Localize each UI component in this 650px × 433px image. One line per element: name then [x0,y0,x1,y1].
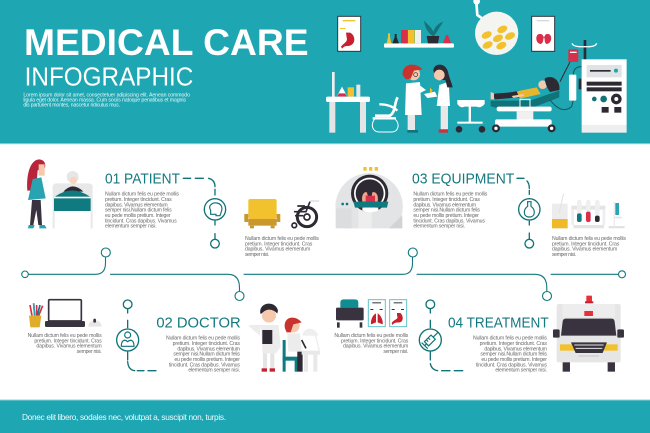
body text: Nullam dictum felis eu pede mollis [166,336,240,342]
surgical lamp [473,0,518,55]
body text: Nullam dictum felis eu pede mollis [413,192,488,198]
side text [334,333,409,355]
title: MEDICAL CARE [24,21,309,63]
side text: dapibus. Vivamus elementum [245,247,310,253]
body text: tincidunt. Cras dapibus. Vivamus [169,362,240,368]
section 04 treatment [334,296,624,374]
heading: 02 DOCTOR [156,314,241,331]
patient on treatment bed [491,77,559,132]
lab table [326,72,370,133]
body text: pretium. Integer tincidunt. Cras [480,341,547,347]
icon: bed [336,299,364,328]
body text: semper nisi.Nullam dictum felis [173,352,240,358]
doctor figure, dark hair [424,65,453,133]
body text: pretium. Integer tincidunt. Cras [105,197,172,203]
icon: test tube rack [571,200,605,228]
icon: stand [609,202,625,228]
dialysis machine [582,59,627,133]
side text: semper nisi. [552,252,576,258]
side text: dapibus. Vivamus elementum [343,344,408,350]
icon: armchair [244,199,280,228]
body text: dapibus. Vivamus elementum [413,202,476,208]
side text: Nullam dictum felis eu pede mollis [28,333,102,339]
illustration: ambulance [553,296,624,372]
body text: dapibus. Vivamus elementum [484,346,547,352]
body text: elementum semper nisi. [188,368,240,374]
side text: Nullam dictum felis eu pede mollis [334,333,409,339]
side text [28,333,102,355]
intro text: dis parturient montes, nascetur ridiculus mus. [23,103,120,109]
body text: eu pede mollis pretium. Integer [105,213,171,219]
side text: dapibus. Vivamus elementum [552,247,617,253]
chair [372,97,398,132]
body text: Nullam dictum felis eu pede mollis [105,192,179,198]
side text: semper nisi. [245,252,269,258]
icon: laptop [45,300,85,327]
title block [23,21,309,109]
icon: pencil cup [29,303,43,327]
illustration: visitor and patient in bed [27,159,93,228]
section 03 equipment [335,167,626,258]
body text: pretium. Integer tincidunt. Cras [173,341,240,347]
icon: mouse [88,319,102,327]
icon: user in circle with connector [117,300,156,371]
side text: pretium. Integer tincidunt. Cras [552,241,620,247]
body text [166,336,240,374]
side text [552,236,626,258]
header illustration: hospital room [326,0,627,133]
shelf with books and plant [384,21,454,48]
body text: eu pede mollis pretium. Integer [413,213,479,219]
doctor figure, red hair [403,65,426,133]
side text: semper nisi. [77,349,102,355]
header band [0,0,650,145]
body text [413,192,488,230]
icon: wheelchair [292,201,319,228]
body text: semper nisi.Nullam dictum felis [480,352,547,358]
side text [245,236,319,258]
IV stand and tubes [550,40,597,110]
side text: pretium. Integer tincidunt. Cras [34,338,102,344]
poster: stomach [338,16,361,51]
body text: semper nisi.Nullam dictum felis [413,208,480,214]
section 01 patient [27,159,319,258]
body text: pretium. Integer tincidunt. Cras [413,197,480,203]
side text: dapibus. Vivamus elementum [36,344,102,350]
body text [105,192,179,230]
body text: dapibus. Vivamus elementum [177,346,240,352]
side text: Nullam dictum felis eu pede mollis [245,236,319,242]
body text: tincidunt. Cras dapibus. Vivamus [476,362,547,368]
body text: Nullam dictum felis eu pede mollis [473,336,547,342]
body text: eu pede mollis pretium. Integer [174,357,240,363]
intro text: Lorem ipsum dolor sit amet, consectetuer adipiscing elit. Aenean commodo [23,92,190,98]
body text: elementum semper nisi. [105,224,157,230]
body text: eu pede mollis pretium. Integer [481,357,547,363]
instrument trolley [456,100,485,133]
poster: stomach [390,300,407,327]
footer text: Donec elit libero, sodales nec, volutpat a, suscipit non, turpis. [22,412,226,422]
illustration: doctors [248,304,320,372]
illustration: MRI scanner [335,167,403,228]
heading: 01 PATIENT [105,170,180,187]
body text: tincidunt. Cras dapibus. Vivamus [105,218,177,224]
side text: pretium. Integer tincidunt. Cras [341,338,409,344]
heading: 04 TREATMENT [448,314,549,331]
section 02 doctor [28,300,320,374]
body text: semper nisi.Nullam dictum felis [105,208,172,214]
side text: pretium. Integer tincidunt. Cras [245,241,313,247]
footer band [0,400,650,433]
timeline connectors [22,248,625,300]
side text: semper nisi. [383,349,408,355]
icon: head in circle with connector [183,178,226,248]
poster: lungs [368,300,385,327]
icon: syringe in circle with connector [419,300,463,371]
side text: Nullam dictum felis eu pede mollis [552,236,626,242]
intro text [23,92,190,109]
body text: elementum semper nisi. [413,224,465,230]
heading: 03 EQUIPMENT [412,170,514,187]
body text: dapibus. Vivamus elementum [105,202,168,208]
body text [473,336,547,374]
icon: flask in circle with connector [517,178,540,248]
icon: beaker [552,193,568,228]
body text: elementum semper nisi. [495,368,547,374]
body text: tincidunt. Cras dapibus. Vivamus [413,218,485,224]
poster: kidneys [532,16,555,51]
intro text: ligula eget dolor. Aenean massa. Cum sociis natoque penatibus et magnis [23,97,186,103]
subtitle: INFOGRAPHIC [25,61,193,91]
